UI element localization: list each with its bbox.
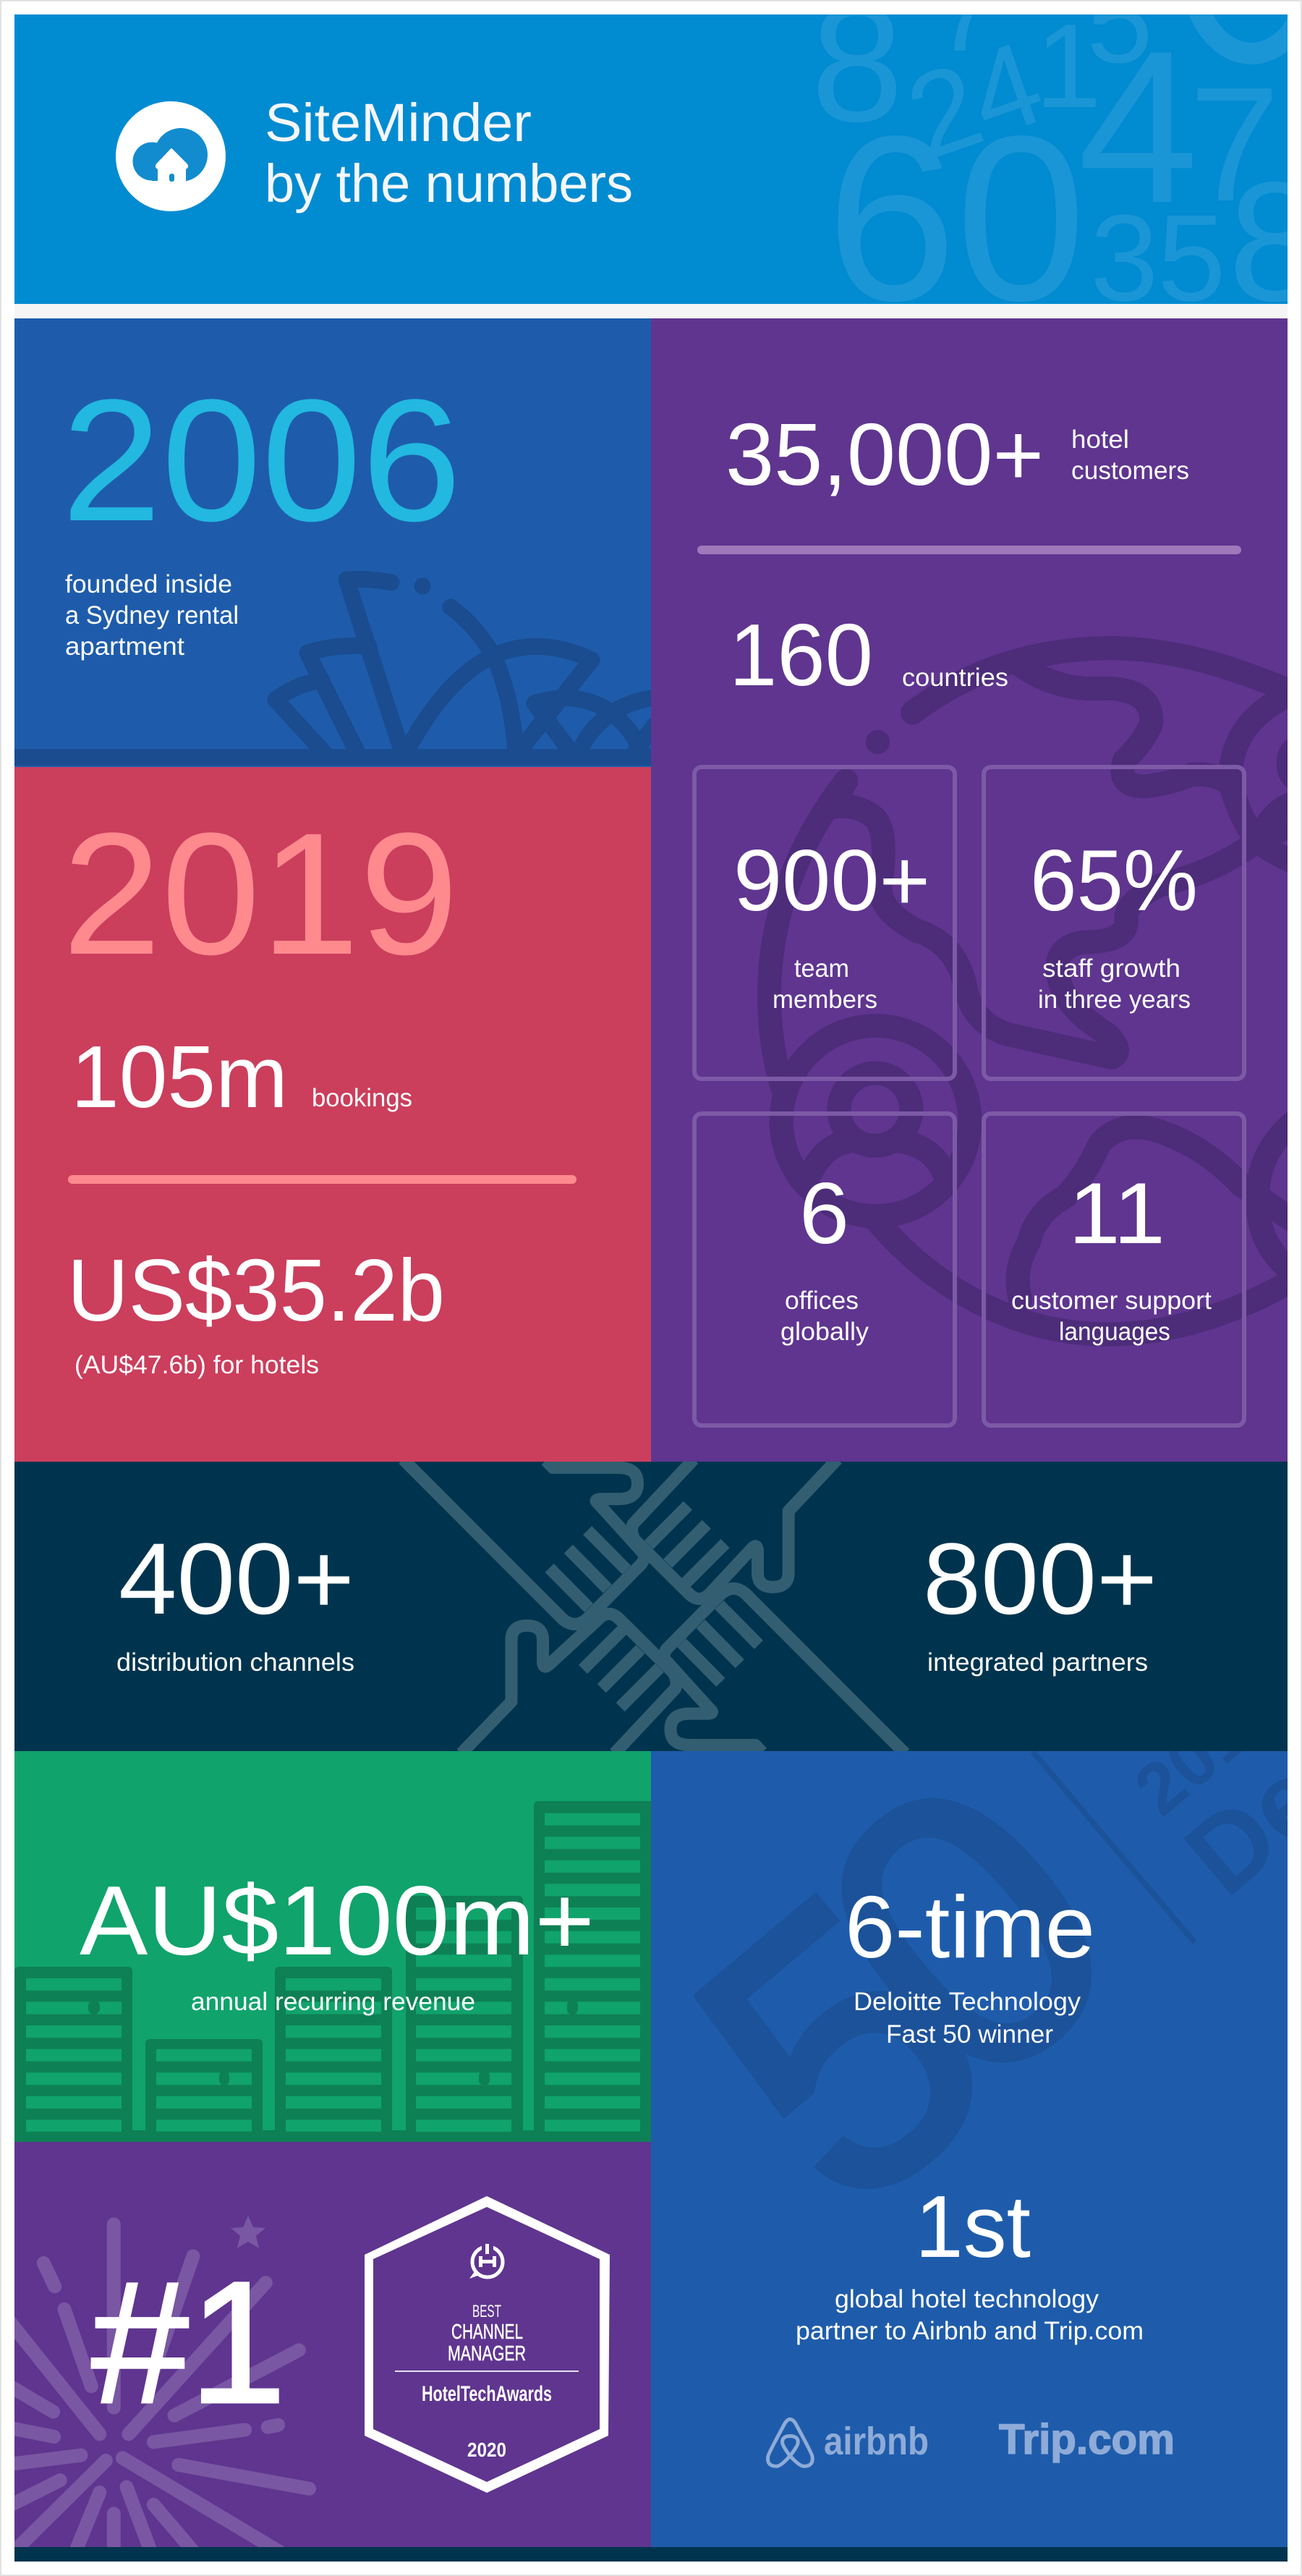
background numbers: 7 [1189,53,1280,235]
stat: distribution channels: 400+ [119,1522,354,1635]
stat: 160 countries: countries [902,664,1008,692]
stat: integrated partners: integrated partners [927,1648,1148,1677]
card: offices: offices [785,1287,859,1315]
stat: bookings: 105m [71,1028,288,1126]
icon: star [231,2216,265,2248]
text: founded [65,570,239,661]
stat: 35,000+ hotel customers: 35,000+ [726,405,1044,504]
stat: 1st partner [796,2177,1144,2345]
background numbers: 0 [956,87,1086,349]
card: staff growth: 65% [1030,832,1198,929]
background numbers [818,14,1288,302]
card: team members [694,767,955,1079]
stat: revenue for hotels: (AU$47.6b) for hotels [75,1351,319,1379]
card: offices: 6 [799,1165,849,1262]
badge: best channel manager: HotelTechAwards [422,2382,552,2406]
badge: best channel manager [365,2196,610,2493]
background numbers: 4 [952,15,1058,163]
icon: cloud house logo [116,101,226,211]
background numbers: 4 [1078,5,1199,248]
panel: 2019 results [14,767,651,1462]
stat: 35,000+ hotel customers: hotel [1071,425,1129,454]
card: languages: languages [1059,1318,1170,1346]
panel: header [14,14,1288,304]
card: staff growth: in three years [1038,986,1191,1014]
badge: best channel manager: MANAGER [448,2342,526,2365]
panel: 2006 founding [14,318,655,767]
background: Deloitte Fast 50 mark: 2019 [1120,1665,1295,1831]
badge: best channel manager: CHANNEL [451,2321,523,2344]
card: offices: globally [780,1318,869,1346]
text: founded: founded inside [65,570,232,598]
stat: 6-time winner: Deloitte Technology [854,1988,1081,2016]
card: staff growth [984,767,1244,1079]
panel: channels and partners [14,1459,1288,1753]
heading: 2019: 2019 [62,797,459,991]
stat: 1st partner: global hotel technology [835,2285,1099,2313]
card: team members: 900+ [733,832,930,929]
title [265,93,633,213]
background: Deloitte Fast 50 mark: 5 [619,1813,1066,2287]
background numbers: 1 [1035,0,1102,132]
stat: 6-time winner [845,1878,1095,2048]
stat: 1st partner: partner to Airbnb and Trip.com [796,2317,1144,2345]
badge: best channel manager: 2020 [467,2439,506,2461]
panel: annual recurring revenue [14,1751,658,2148]
card: offices [694,1114,955,1425]
stat: 35,000+ hotel customers [726,405,1189,504]
title: by the numbers [265,153,633,213]
stat: 160 countries: 160 [729,606,873,704]
divider [697,546,1241,554]
title: SiteMinder [265,93,532,153]
icon: hotel tech report [469,2242,503,2279]
stat: integrated partners: 800+ [923,1522,1157,1635]
panel: number one award [8,2142,651,2557]
logo: Trip.com: Trip.com [999,2416,1175,2463]
stat: revenue for hotels: US$35.2b [67,1241,445,1339]
panel: awards and partners [651,1751,1288,2547]
stat: 160 countries [729,606,1008,704]
card: languages: customer support [1011,1287,1212,1315]
stat: 6-time winner: 6-time [845,1878,1095,1976]
card: staff growth: staff growth [1042,954,1180,983]
background: Deloitte Fast 50 mark [693,1751,1288,2189]
text: founded: a Sydney rental [65,601,239,630]
badge: best channel manager: BEST [472,2302,501,2321]
stat: #1: #1 [91,2245,286,2439]
stat: bookings: bookings [312,1084,412,1112]
icon: fireworks [8,2224,310,2557]
logo: airbnb [767,2419,929,2466]
background numbers: 5 [1157,190,1226,327]
divider [68,1175,576,1184]
stat: 1st partner: 1st [915,2177,1031,2276]
heading: 2006: 2006 [61,363,461,557]
icon: globe with person [770,648,1302,1334]
icon: Sydney Opera House [14,577,655,766]
stat: distribution channels: distribution channels [116,1648,354,1677]
card: team members: team [794,954,849,983]
background: Deloitte Fast 50 mark: 0 [744,1693,1191,2167]
icon: joined hands [403,1459,905,1753]
stat: AU$100m+: AU$100m+ [80,1865,595,1975]
background numbers: 3 [1090,190,1159,327]
stat: 35,000+ hotel customers: customers [1071,457,1189,485]
stat: 6-time winner: Fast 50 winner [886,2020,1053,2048]
card: team members: members [773,986,877,1014]
footer strip [14,2547,1288,2562]
logo: airbnb: airbnb [824,2420,929,2463]
card: languages [984,1114,1244,1425]
stat: AU$100m+: annual recurring revenue [191,1988,475,2016]
card: languages: 11 [1068,1165,1165,1262]
stat: bookings [71,1028,412,1126]
background numbers: 2 [891,37,997,185]
stat: revenue for hotels [67,1241,445,1379]
background numbers: 6 [826,87,957,349]
icon: city buildings [14,1801,658,2148]
panel: customers and team [651,318,1302,1462]
text: founded: apartment [65,632,184,661]
